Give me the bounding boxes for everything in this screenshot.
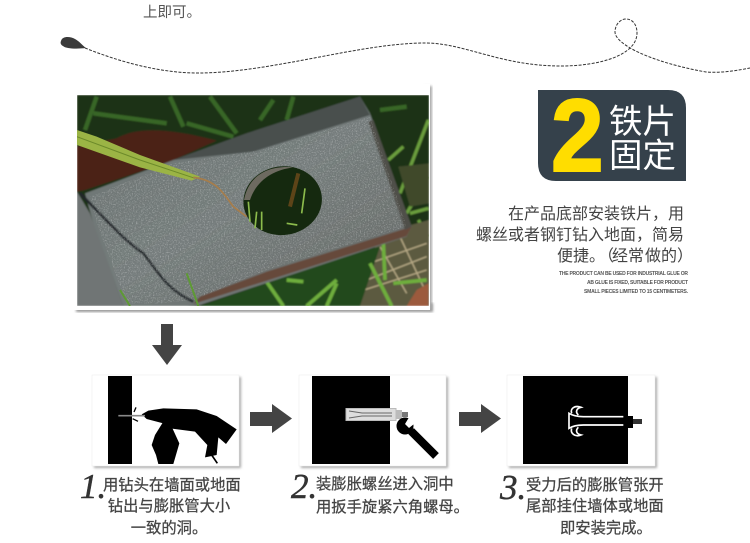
- step 1 caption: [80, 467, 241, 537]
- step 3 caption: 受力后的膨胀管张开: [526, 477, 664, 494]
- arrow: step 2 to 3: [459, 404, 501, 433]
- step 3 caption: 尾部挂住墙体或地面: [526, 498, 664, 515]
- step 1 caption: 1.: [80, 467, 106, 506]
- description text: [476, 205, 693, 265]
- step 3 caption: [499, 468, 664, 537]
- panel: step 1 drill illustration: [92, 375, 241, 468]
- arrow: down: [152, 324, 182, 365]
- previous step text fragment: 上即可。: [143, 4, 201, 21]
- English small print: AB GLUE IS FIXED, SUITABLE FOR PRODUCT: [587, 280, 688, 286]
- step 3 caption: 即安装完成。: [560, 520, 652, 537]
- description text: 在产品底部安装铁片，用: [508, 205, 684, 223]
- English small print: SMALL PIECES LIMITED TO 15 CENTIMETERS.: [584, 289, 689, 295]
- description text: 便捷。（经常做的）: [557, 247, 693, 265]
- section badge: 2 铁片固定: [538, 77, 686, 193]
- step 2 caption: [291, 467, 469, 516]
- dashed divider curve with droplet: [61, 19, 750, 73]
- English small print: [559, 271, 689, 295]
- panel: step 2 bolt and wrench illustration: [299, 375, 448, 468]
- step 1 caption: 用钻头在墙面或地面: [103, 477, 241, 494]
- step 2 caption: 装膨胀螺丝进入洞中: [316, 476, 454, 493]
- step 2 caption: 用扳手旋紧六角螺母。: [316, 498, 469, 516]
- photo: iron plate with hole, in white frame: [72, 84, 433, 312]
- step 3 caption: 3.: [499, 468, 526, 507]
- description text: 螺丝或者钢钉钻入地面，简易: [476, 226, 684, 244]
- section badge: 2 铁片固定: 固定: [609, 138, 676, 175]
- section badge: 2 铁片固定: 2: [551, 77, 604, 193]
- arrow: step 1 to 2: [250, 404, 292, 433]
- English small print: THE PRODUCT CAN BE USED FOR INDUSTRIAL GLUE OR: [559, 271, 688, 277]
- step 2 caption: 2.: [291, 467, 317, 506]
- step 1 caption: 钻出与膨胀管大小: [108, 498, 230, 515]
- section badge: 2 铁片固定: 铁片: [609, 104, 676, 141]
- panel: step 3 expanded anchor illustration: [507, 375, 657, 468]
- step 1 caption: 一致的洞。: [131, 520, 207, 537]
